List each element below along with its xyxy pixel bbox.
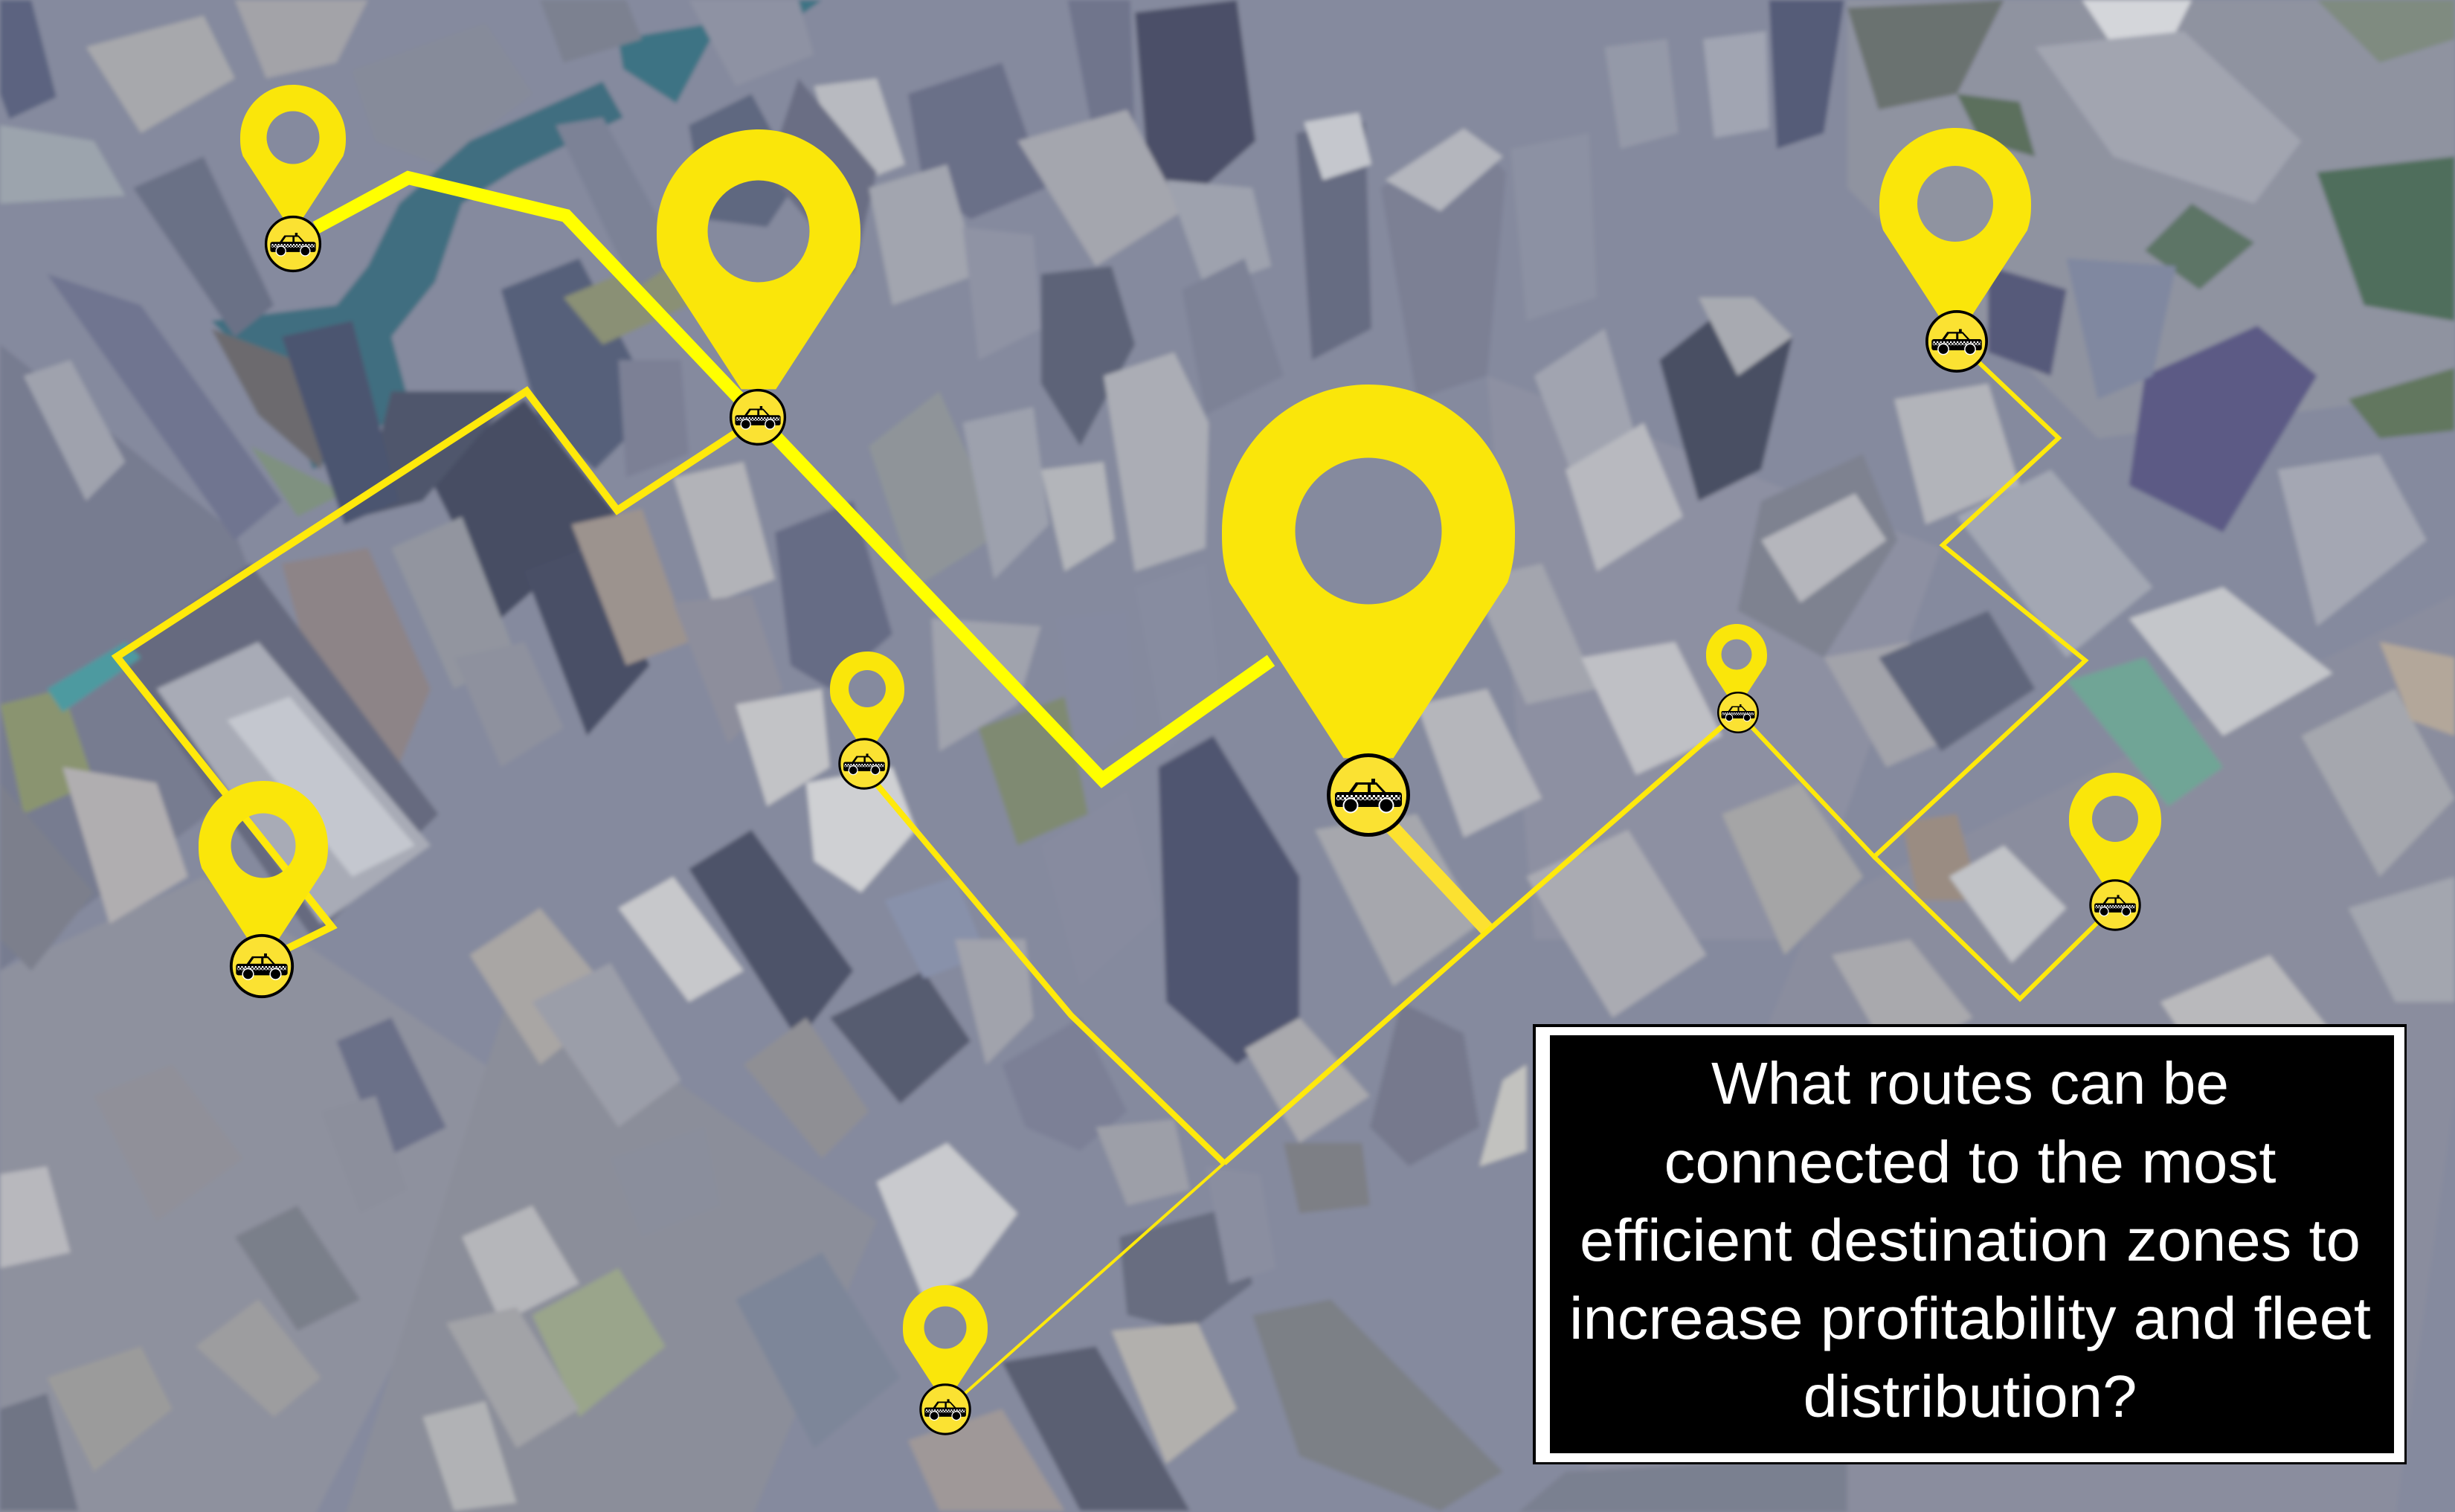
- route: link to east: [1224, 712, 1738, 1163]
- upper left towers: [133, 156, 274, 337]
- callout: question box: distribution?: [1803, 1363, 2137, 1429]
- route: thin link to south pin: [959, 1163, 1224, 1398]
- center right: [1315, 814, 1479, 986]
- pin: north-east: [1879, 128, 2031, 371]
- dark water/shadow: [426, 399, 618, 618]
- pin: north-west: [240, 85, 346, 271]
- rivers: [211, 81, 623, 469]
- callout: question box: increase profitability and fleet: [1569, 1285, 2371, 1351]
- mid buildings: [618, 360, 689, 477]
- callout: question box: [1533, 1024, 2407, 1464]
- callout: question box: connected to the most: [1664, 1129, 2276, 1195]
- pin: inner centre: [830, 652, 904, 788]
- lower left: [470, 908, 618, 1064]
- pin: small east: [1706, 624, 1767, 733]
- pin: largest centre: [1222, 385, 1515, 834]
- callout: question box: What routes can be: [1711, 1050, 2229, 1116]
- callout: question box: efficient destination zones to: [1580, 1207, 2361, 1273]
- route: south-east link: [1874, 857, 2115, 999]
- route: main thick line: [316, 178, 1271, 779]
- route: west loop: [117, 391, 744, 949]
- train station lights: [118, 564, 438, 939]
- pin: west: [199, 781, 328, 997]
- route: big pin connector: [1383, 818, 1487, 930]
- pin: south: [903, 1285, 988, 1434]
- route: central diagonal: [874, 781, 1224, 1163]
- pin: south-east: [2069, 773, 2161, 930]
- top row: [0, 0, 57, 119]
- pin: north centre: [657, 129, 860, 444]
- far zones: [0, 344, 313, 971]
- route: eastern zigzag: [1738, 341, 2085, 857]
